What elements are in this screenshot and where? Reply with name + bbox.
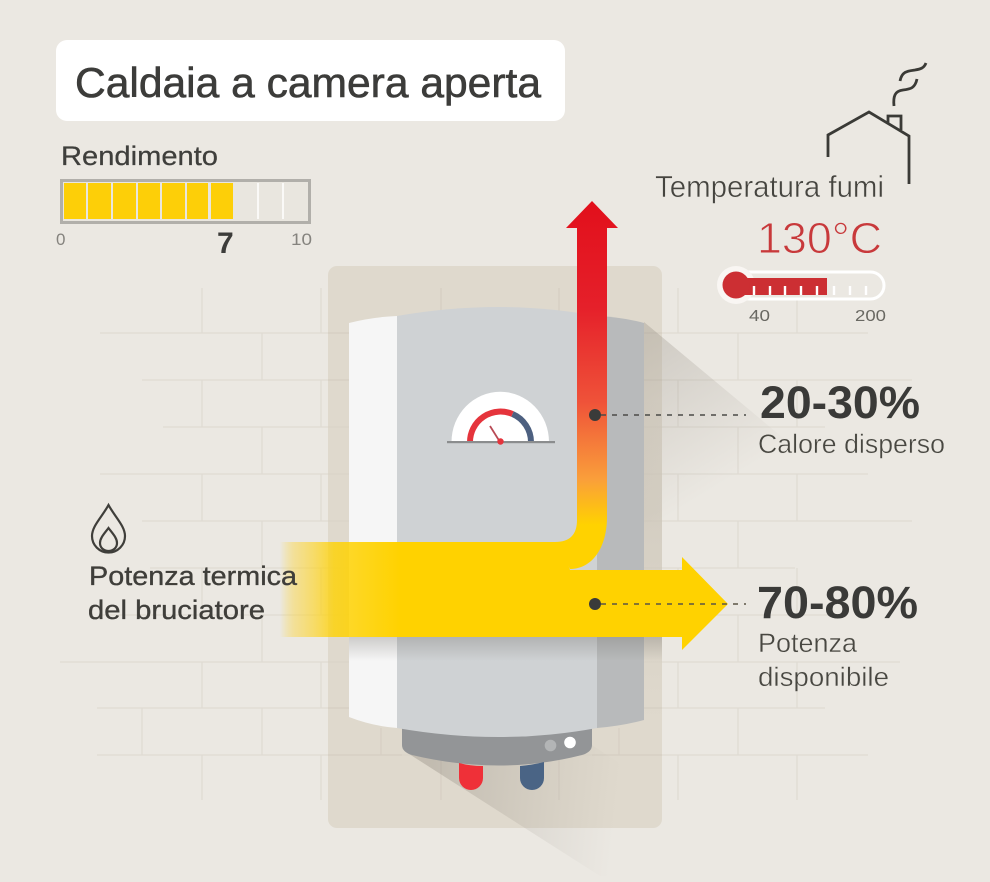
boiler shadow strip on panel: [644, 400, 662, 720]
stat: available power: 70-80%: [757, 577, 918, 628]
title box: [56, 40, 565, 121]
thermometer: 200: [855, 308, 886, 325]
icon: house with smoking chimney: [828, 63, 926, 184]
burner power label: Potenza termica: [89, 561, 298, 591]
thermometer: 40: [749, 308, 770, 325]
icon: flame: [92, 505, 125, 552]
water heater boiler: [349, 307, 644, 790]
boiler lower cap: [402, 726, 592, 766]
boiler cast shadow right: [644, 322, 800, 560]
temperature gauge: [447, 392, 555, 445]
stat: heat lost: 20-30%: [760, 377, 920, 428]
efficiency scale labels: 7: [217, 227, 234, 260]
hot water pipe: [459, 763, 483, 790]
stat: available power: disponibile: [758, 662, 889, 692]
burner power label: del bruciatore: [88, 595, 265, 625]
flue temperature value: 130°C: [757, 214, 882, 263]
boiler body centre: [397, 307, 597, 737]
efficiency scale labels: 0: [56, 230, 65, 249]
flue temperature label: Temperatura fumi: [655, 169, 884, 204]
efficiency bar: [62, 180, 310, 222]
efficiency scale labels: [56, 227, 312, 260]
stat: heat lost: Calore disperso: [758, 429, 945, 459]
efficiency rating: [56, 141, 312, 260]
panel: wall backing plate: [328, 266, 662, 828]
flue temperature: [655, 169, 886, 325]
boiler cast shadow bottom: [406, 745, 660, 880]
efficiency heading: Rendimento: [61, 141, 218, 171]
boiler body left highlight: [349, 316, 397, 728]
callout line: available power: [589, 598, 746, 610]
thermometer: [717, 266, 886, 325]
callout line: heat lost: [589, 409, 746, 421]
title box: Caldaia a camera aperta: [75, 59, 542, 106]
stat: available power: [757, 577, 918, 692]
stat: heat lost: [758, 377, 945, 459]
burner power label: [88, 561, 298, 625]
cap indicator lights: [545, 737, 576, 751]
burner power arrow yellow: [280, 542, 728, 650]
stat: available power: Potenza: [758, 628, 858, 658]
efficiency scale labels: 10: [291, 230, 312, 249]
boiler body right shade: [597, 316, 644, 728]
cold water pipe: [520, 762, 544, 790]
band shadow on boiler: [349, 637, 662, 661]
flue gas arrow red: [555, 201, 618, 569]
